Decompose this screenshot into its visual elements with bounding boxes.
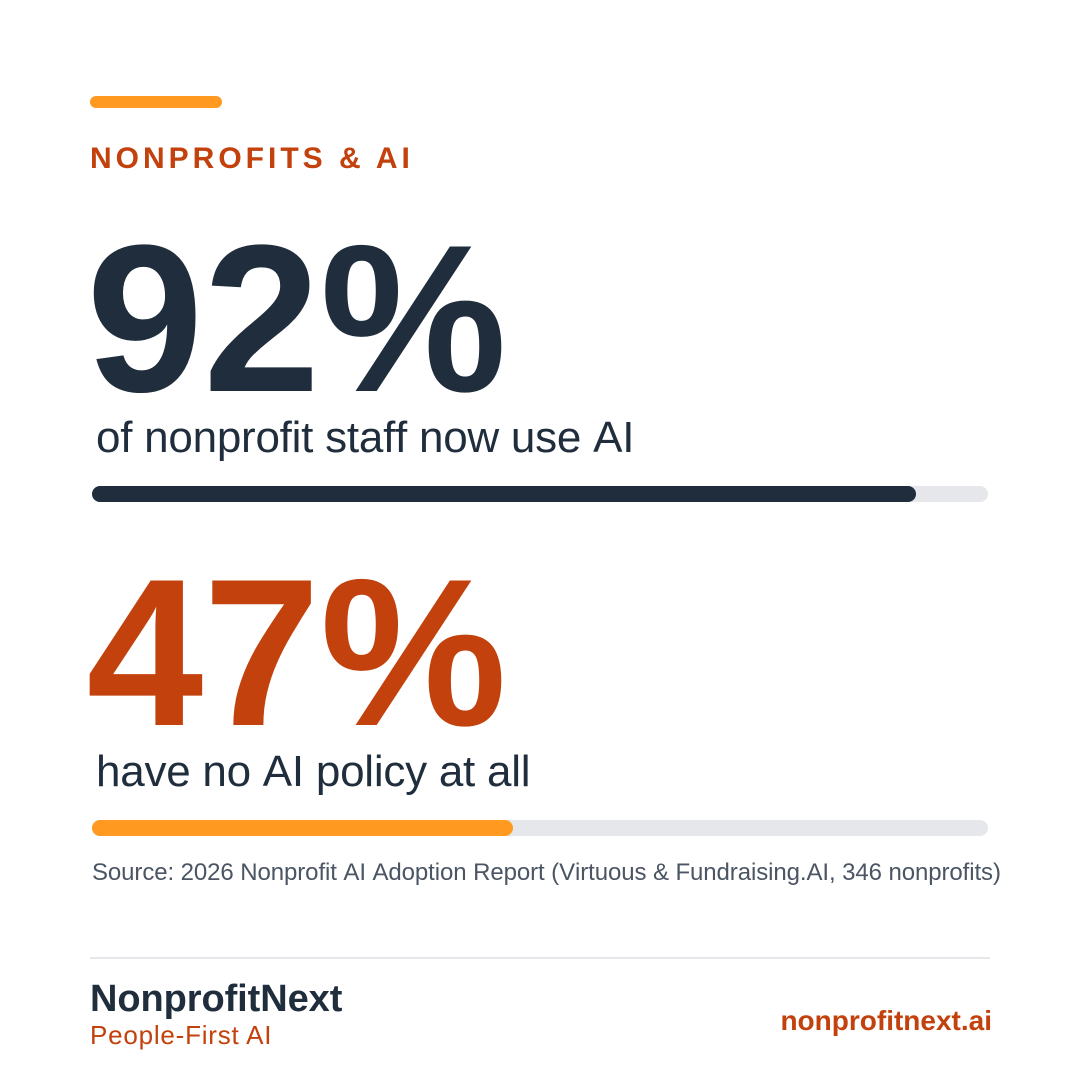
progress fill: 47% xyxy=(92,820,513,836)
footer divider xyxy=(90,957,990,959)
stat: 47%: 47% xyxy=(86,535,507,770)
accent bar xyxy=(90,96,222,108)
progress bar: 47% xyxy=(92,820,988,836)
stat label: staff use AI: of nonprofit staff now use AI xyxy=(96,413,634,462)
stat label: no AI policy: have no AI policy at all xyxy=(96,747,530,796)
stat: 92%: 92% xyxy=(86,201,507,436)
eyebrow heading: NONPROFITS & AI xyxy=(90,142,414,175)
progress fill: 92% xyxy=(92,486,916,502)
progress bar: 92% xyxy=(92,486,988,502)
brand tagline: People-First AI xyxy=(90,1020,272,1050)
website url: nonprofitnext.ai xyxy=(780,1005,992,1036)
source note: Source: 2026 Nonprofit AI Adoption Report (Virtuous & Fundraising.AI, 346 nonprofits) xyxy=(92,859,1001,886)
brand name: NonprofitNext xyxy=(90,978,342,1020)
